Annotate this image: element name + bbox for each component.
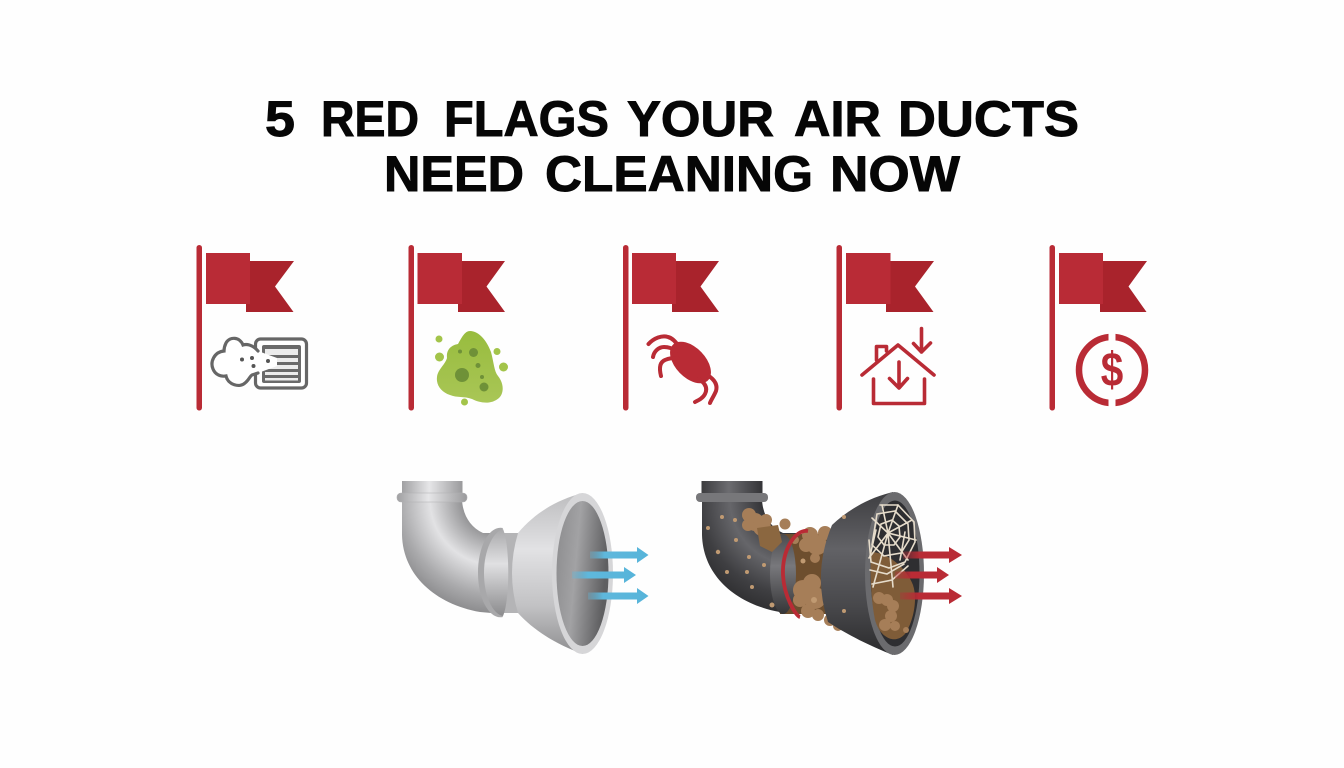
- red flag: [623, 245, 719, 410]
- title: [265, 91, 1079, 202]
- icon: green mold blob: [435, 331, 508, 406]
- title: DUCTS: [898, 91, 1079, 147]
- icon: house with down arrows: [862, 328, 934, 404]
- red flag: [1050, 245, 1147, 410]
- title: 5: [265, 91, 295, 147]
- title: RED: [321, 91, 419, 147]
- red flag: [196, 245, 294, 410]
- dirty elbow pipe: [696, 481, 830, 614]
- icon: dollar circle: $: [1101, 344, 1124, 397]
- red rusted ring: [783, 531, 808, 617]
- flag 3: pests: [623, 245, 719, 410]
- dust specks: [706, 515, 846, 613]
- red flag: [408, 245, 505, 410]
- icon: vent blowing dust cloud: [212, 338, 306, 388]
- red flag: [836, 245, 934, 410]
- flag 5: rising cost: [1050, 245, 1147, 410]
- icon: dollar circle: [1079, 330, 1145, 410]
- spider web: [869, 505, 916, 587]
- blue airflow arrows: [572, 547, 648, 604]
- title: NEED: [384, 146, 524, 202]
- dirty duct illustration: [696, 481, 962, 655]
- icon: bug: [648, 334, 719, 403]
- red airflow arrows: [895, 547, 962, 604]
- flag 2: mold: [408, 245, 508, 410]
- title: AIR: [794, 91, 881, 147]
- clean elbow pipe: [397, 481, 522, 617]
- clean cone mouth: [512, 493, 613, 654]
- title: FLAGS: [444, 91, 609, 147]
- clean duct illustration: [397, 481, 648, 654]
- dirty cone mouth: [821, 492, 924, 655]
- dirt clumps: [742, 508, 843, 631]
- flag 1: poor airflow: [196, 245, 306, 410]
- title: CLEANING: [545, 146, 813, 202]
- title: NOW: [830, 146, 961, 202]
- flag 4: rising energy in home: [836, 245, 934, 410]
- title: YOUR: [627, 91, 774, 147]
